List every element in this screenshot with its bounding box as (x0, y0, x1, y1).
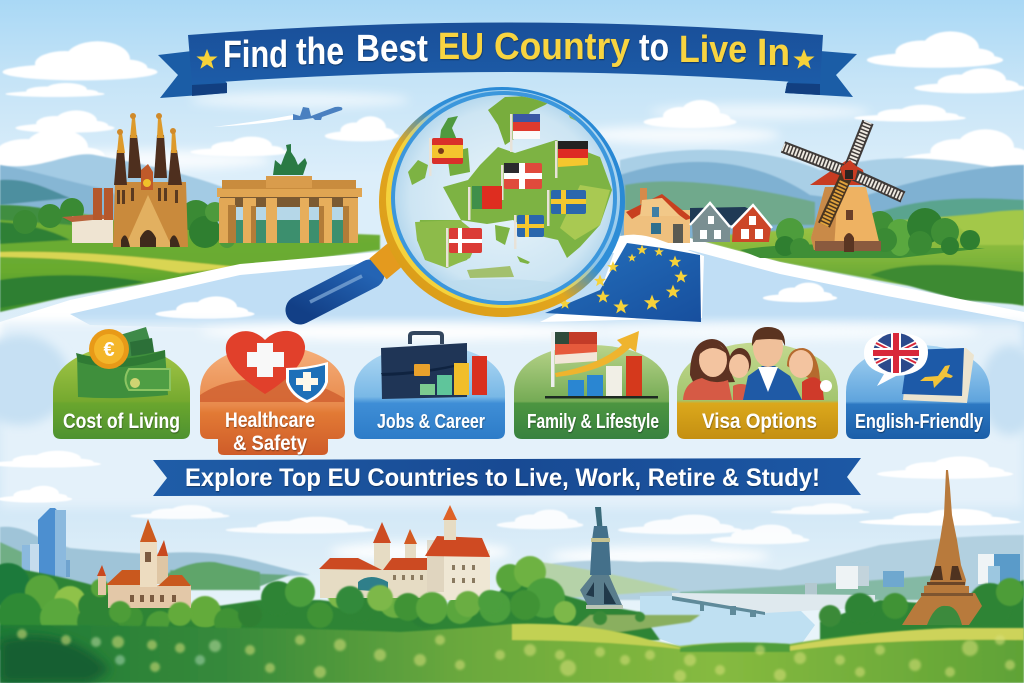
icon: white cross (247, 343, 284, 377)
title text: Live (679, 29, 747, 71)
title ribbon (158, 22, 857, 98)
label: Jobs & Career (377, 411, 485, 433)
houses (624, 188, 772, 243)
ribbon tails (158, 51, 227, 98)
icon: airplane with trail (213, 107, 342, 127)
flag: Denmark (446, 228, 482, 267)
right green meadow (690, 210, 1024, 306)
icon: family (683, 327, 832, 400)
landmark: Sagrada Familia cathedral (62, 113, 188, 247)
icon: flag (551, 332, 597, 387)
grass foreground (0, 624, 1024, 683)
title text: to (639, 27, 669, 69)
distant lower hills (0, 527, 1024, 600)
title text: In (757, 32, 790, 74)
card: Family & Lifestyle (514, 331, 669, 439)
title text: Country (494, 26, 630, 68)
landmark: castle left (97, 519, 191, 608)
label: English-Friendly (855, 411, 984, 433)
trees: in front of castles (109, 585, 502, 626)
landmark: castle right (319, 505, 490, 600)
flag: Sweden small (514, 215, 544, 249)
landmark: small tower (580, 507, 623, 609)
flag: Sweden large (547, 190, 586, 226)
subtitle text: Explore Top EU Countries to Live, Work, Retire & Study! (185, 464, 820, 492)
flag: Spain (429, 138, 463, 176)
trees: around windmill (740, 208, 985, 258)
landmark: windmill (783, 122, 903, 252)
label line 1: Healthcare (225, 409, 315, 432)
clouds: top sky (0, 31, 1024, 170)
flower bokeh (17, 629, 1015, 682)
middle cloud band (0, 322, 1024, 526)
bridge (672, 593, 875, 617)
river band (0, 238, 1024, 350)
EU flag (540, 235, 704, 322)
trees: around cathedral (13, 198, 235, 248)
card: Visa Options (677, 327, 838, 439)
magnifying glass (300, 87, 625, 317)
city skyline: right (805, 554, 1020, 597)
label line 2: & Safety (233, 432, 307, 455)
title text: Best (356, 28, 428, 70)
river: lower (640, 596, 815, 646)
card: Healthcare & Safety (200, 331, 345, 455)
city skyline: left (22, 508, 70, 577)
title text: Find (223, 34, 288, 76)
green trees: mid (261, 577, 511, 628)
icon: briefcase (381, 333, 467, 399)
icon: shield (286, 362, 328, 403)
label: Visa Options (702, 410, 817, 433)
subtitle ribbon (153, 458, 861, 496)
title text: the (296, 31, 344, 73)
icon: heart (226, 331, 305, 394)
clouds: lower sky (130, 503, 870, 565)
bar chart (545, 356, 658, 398)
left green meadow (0, 205, 380, 312)
handle (300, 254, 396, 310)
flag: black white red cross (501, 163, 542, 200)
card: English-Friendly (846, 333, 990, 439)
icon: passport (902, 348, 974, 403)
title text: EU (438, 26, 484, 68)
label: Cost of Living (63, 410, 180, 433)
label: Family & Lifestyle (527, 411, 659, 433)
landmark: Eiffel Tower (902, 470, 982, 625)
flag: Germany (555, 141, 588, 178)
card: Jobs & Career (354, 333, 505, 439)
icon: wallet with euro coin: € (103, 339, 115, 361)
green tree band: base (0, 566, 1024, 650)
flag: green red (468, 186, 502, 220)
map in lens (390, 90, 620, 305)
title star left (196, 49, 218, 69)
bar chart (420, 356, 487, 395)
distant blue hills (0, 150, 1024, 240)
green trees: centre right (496, 556, 1024, 627)
green trees: left foreground (0, 563, 262, 640)
icon: speech bubble with UK flag (864, 333, 928, 386)
flag: blue red white (510, 114, 540, 152)
landmark: Brandenburg Gate (217, 144, 362, 243)
ribbon body (188, 22, 823, 84)
lens frame (379, 87, 625, 317)
title star right (793, 49, 815, 69)
card: Cost of Living (53, 327, 190, 439)
icon: rising arrow (555, 331, 639, 377)
